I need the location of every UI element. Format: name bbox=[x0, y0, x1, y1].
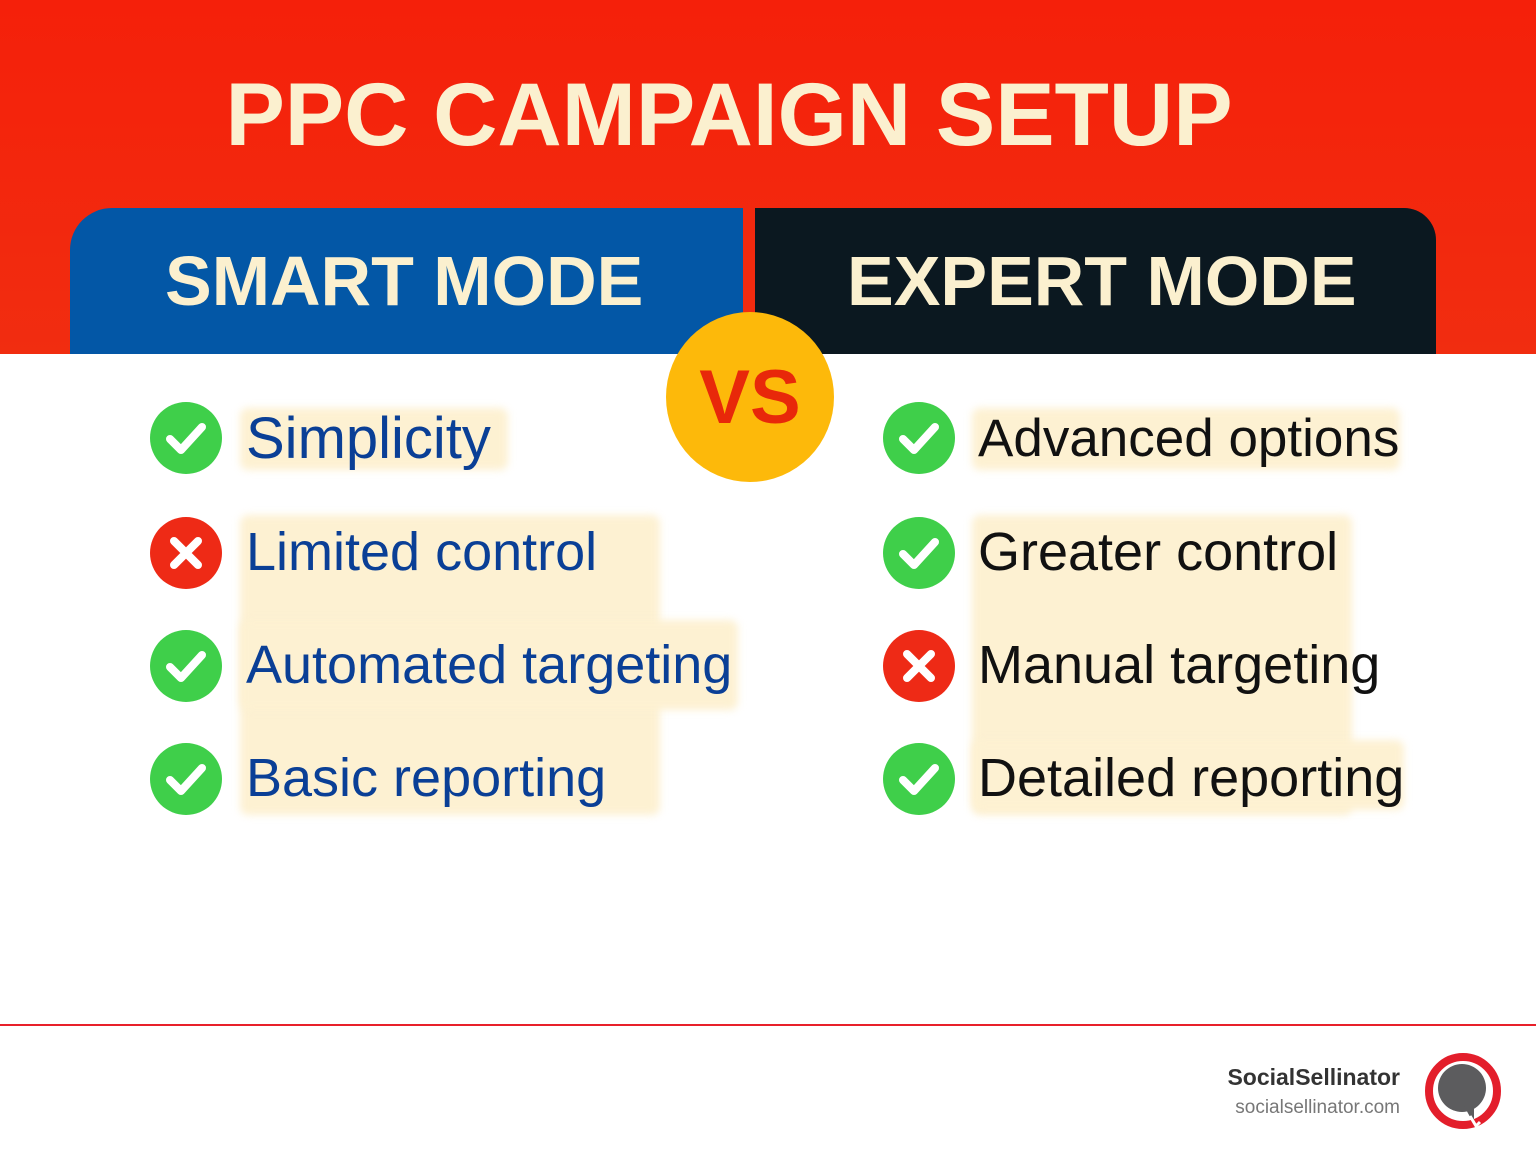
highlights bbox=[240, 408, 508, 470]
item: limited control bbox=[150, 517, 597, 589]
panel: smart mode header: SMART MODE bbox=[165, 242, 643, 320]
item: simplicity: Simplicity bbox=[246, 406, 491, 471]
footer brand text: SocialSellinator bbox=[1227, 1064, 1400, 1090]
footer brand text bbox=[1227, 1064, 1400, 1118]
list: smart mode bbox=[150, 402, 732, 815]
item: basic reporting bbox=[150, 743, 606, 815]
item: basic reporting: Basic reporting bbox=[246, 748, 606, 808]
item: manual targeting bbox=[883, 630, 1380, 702]
item: automated targeting: Automated targeting bbox=[246, 635, 732, 695]
vs badge: VS bbox=[699, 354, 801, 440]
item: simplicity bbox=[150, 402, 491, 474]
item: limited control: Limited control bbox=[246, 522, 597, 582]
panel: expert mode header: EXPERT MODE bbox=[847, 242, 1357, 320]
header band bbox=[0, 0, 1536, 354]
footer brand text: socialsellinator.com bbox=[1235, 1097, 1400, 1118]
panel: smart mode header bbox=[70, 208, 743, 354]
item: greater control: Greater control bbox=[978, 522, 1338, 582]
item: advanced options: Advanced options bbox=[978, 409, 1399, 468]
vs badge bbox=[666, 312, 834, 482]
item: detailed reporting: Detailed reporting bbox=[978, 748, 1404, 808]
item: greater control bbox=[883, 517, 1338, 589]
list: expert mode bbox=[883, 402, 1404, 815]
item: detailed reporting bbox=[883, 743, 1404, 815]
title: PPC CAMPAIGN SETUP bbox=[225, 64, 1233, 164]
item: automated targeting bbox=[150, 630, 732, 702]
item: manual targeting: Manual targeting bbox=[978, 635, 1380, 695]
item: advanced options bbox=[883, 402, 1399, 474]
icon: logo bbox=[1425, 1053, 1501, 1129]
panel: expert mode header bbox=[755, 208, 1436, 354]
